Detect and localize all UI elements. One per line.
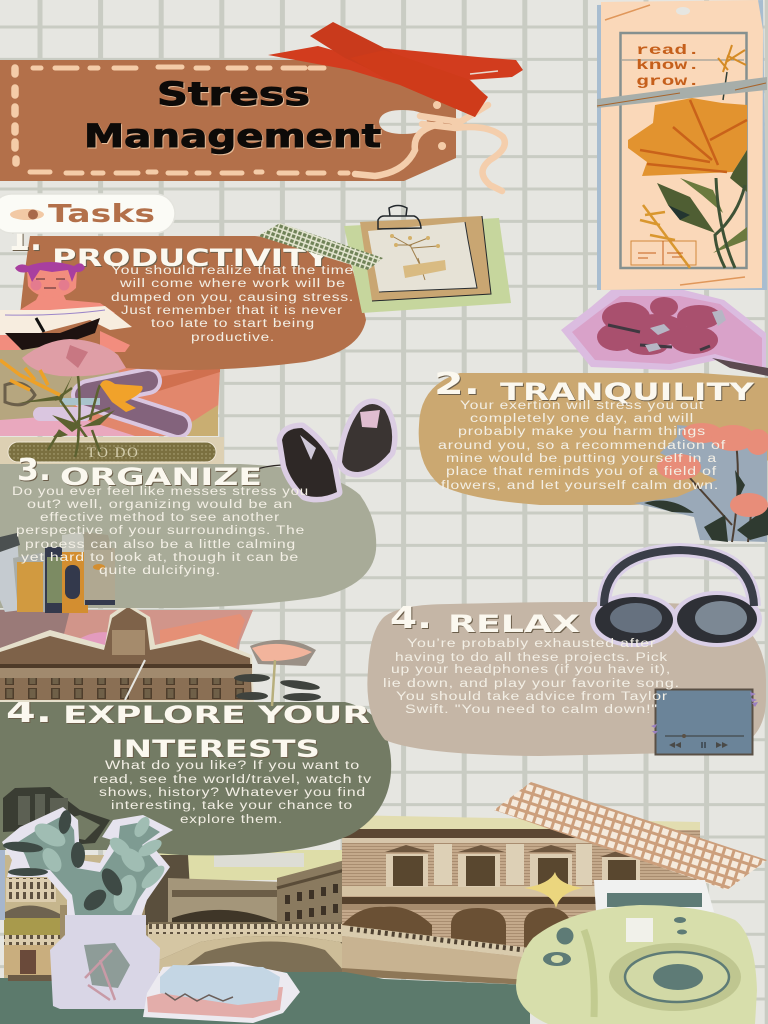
book <box>5 318 100 350</box>
text: relax: You’re probably exhausted after <box>407 638 656 650</box>
heading: explore <box>6 695 370 763</box>
stone bridge <box>148 922 372 975</box>
right palace <box>342 826 700 960</box>
rose blooms <box>657 423 768 517</box>
small gold sprig <box>640 205 690 268</box>
left palace wall <box>4 855 152 978</box>
panel: tranquility <box>419 367 768 542</box>
headband sticker outline <box>604 550 754 606</box>
leaf mass <box>18 815 160 918</box>
text: tranquility: around you, so a recommendation of <box>438 440 726 452</box>
collage: pink building scene <box>0 603 254 702</box>
tagline <box>636 43 700 90</box>
lilac sticker outlines <box>282 428 337 497</box>
headband <box>604 550 754 606</box>
title <box>84 75 381 155</box>
text: relax: You should take advice from Taylor <box>396 691 668 703</box>
text: productivity: will come where work will be <box>119 278 346 290</box>
pressed plant <box>392 236 438 280</box>
lilac outline <box>561 290 766 375</box>
icon: music player <box>651 690 758 754</box>
icon: plant in glass jar <box>2 807 173 1009</box>
heading: productivity <box>8 223 331 272</box>
pink bloom <box>22 339 126 376</box>
orange lily <box>628 98 747 176</box>
pale leaves <box>31 814 168 914</box>
small top sprig <box>718 45 746 72</box>
heading: tranquility: 2. <box>434 367 480 402</box>
text: productivity: too late to start being <box>151 318 315 330</box>
left boot <box>282 428 337 497</box>
face lines <box>36 279 65 288</box>
panel: read know grow bookmark <box>597 0 767 290</box>
icon: peach rose <box>234 640 321 706</box>
text: tranquility: mine would be putting yourself in a <box>446 453 717 465</box>
heading: tranquility: TRANQUILITY <box>500 378 755 406</box>
palace quay <box>342 936 530 985</box>
heading: productivity: PRODUCTIVITY <box>52 244 331 272</box>
heading: organize <box>17 453 262 491</box>
camera body <box>516 905 757 1024</box>
mini label <box>631 241 696 265</box>
mid building <box>277 860 345 932</box>
text: relax <box>383 638 680 716</box>
flower stems over label <box>48 420 100 457</box>
text: productivity: productive. <box>191 332 275 344</box>
text: productivity: Just remember that it is never <box>121 305 343 317</box>
heading: explore: INTERESTS <box>111 735 320 763</box>
camera buttons <box>556 928 574 944</box>
palace arches <box>384 907 572 955</box>
panel: tasks label <box>0 194 175 233</box>
icon: cream string <box>355 105 505 191</box>
text: tranquility: Your exertion will stress you out <box>460 400 704 412</box>
text: tranquility: flowers, and let yourself calm down. <box>441 480 719 492</box>
lens <box>609 943 741 1011</box>
icon: headphones <box>590 550 762 647</box>
strawberries <box>597 297 721 355</box>
text: explore: interesting, take your chance to <box>111 800 353 812</box>
text: organize: perspective of your surroundings. The <box>16 525 305 537</box>
icon: toggle <box>10 209 44 220</box>
panel: title tag <box>0 60 456 181</box>
pale sky gap <box>150 850 345 880</box>
lace <box>250 465 282 472</box>
hands <box>572 296 762 368</box>
text: relax: having to do all these projects. Pick <box>395 652 668 664</box>
panel: to do label <box>0 437 224 465</box>
venice collage photo <box>0 815 700 1024</box>
panel: tasks label: Tasks <box>48 199 155 228</box>
heading: relax: 4. <box>390 601 432 636</box>
text: organize: quite dulcifying. <box>99 565 221 577</box>
heading: explore: 4. <box>6 695 52 730</box>
lily leaves and stem <box>680 178 723 213</box>
binder clip <box>378 206 421 229</box>
text: productivity: You should realize that the time <box>111 265 354 277</box>
stems <box>48 376 110 455</box>
text: explore: explore them. <box>180 814 283 826</box>
panel: relax <box>367 550 766 756</box>
icon: pink roses <box>634 423 768 542</box>
icon: old books sketch <box>3 787 110 845</box>
blue-gray backing <box>634 425 767 542</box>
text: organize: Do you ever feel like messes stress you <box>12 486 309 498</box>
gray tape band <box>597 77 767 108</box>
panel: explore your interests <box>0 695 391 855</box>
icon: clipboard with pressed plant <box>344 206 511 313</box>
panel: to do label: TO DO <box>87 445 139 461</box>
viewfinder <box>626 918 653 942</box>
title: Stress <box>157 75 310 113</box>
strawberry stems <box>608 325 710 350</box>
tagline: know. <box>636 58 700 74</box>
orange oval book <box>62 550 88 613</box>
orange book <box>13 552 46 612</box>
film print <box>594 880 714 912</box>
text: explore: read, see the world/travel, watch tv <box>93 774 372 786</box>
text: relax: lie down, and play your favorite song. <box>383 678 680 690</box>
text: tranquility: probably make you harm things <box>458 426 706 438</box>
text: organize: yet hard to look at, though it can be <box>21 552 299 564</box>
palace balustrade <box>342 925 530 958</box>
yellow sprig <box>0 360 60 395</box>
icon: baby shoes <box>250 404 392 497</box>
right boot <box>342 404 392 472</box>
text: relax: Swift. "You need to calm down!" <box>405 704 658 716</box>
green washi tape <box>258 223 383 270</box>
title: Management <box>84 117 381 155</box>
text: tranquility: place that reminds you of a field of <box>446 466 717 478</box>
text: organize <box>12 486 309 577</box>
palace columns <box>434 844 592 885</box>
frame <box>620 33 746 268</box>
icon: soap on pink dish <box>143 962 300 1023</box>
leaves sticker outline <box>2 807 173 920</box>
shaded tower <box>145 855 192 925</box>
hair <box>15 262 85 282</box>
water <box>0 972 530 1024</box>
collage: pink and orange torn paper <box>0 345 221 436</box>
blouse <box>0 306 132 335</box>
text: productivity: dumped on you, causing stress. <box>111 292 354 304</box>
lilac bone shape <box>40 407 85 421</box>
forearm <box>100 331 130 352</box>
palace cut-out outline <box>0 603 254 702</box>
text: organize: process can also be a little calming <box>25 539 296 551</box>
heading: organize: ORGANIZE <box>60 463 262 491</box>
bridge of sighs <box>168 878 282 925</box>
palace facade <box>0 607 252 700</box>
text: relax: up your headphones (if you have it), <box>391 664 671 676</box>
dark green book <box>45 547 63 613</box>
neck and shoulders <box>15 292 115 313</box>
petal shading <box>640 100 747 172</box>
plaid washi tape <box>494 782 767 890</box>
petals <box>628 98 747 176</box>
heading: tranquility <box>434 367 755 406</box>
icon: hands holding strawberries <box>561 290 768 376</box>
glass jar <box>50 915 160 1009</box>
head <box>27 266 77 297</box>
panel: organize <box>0 404 392 613</box>
heading: organize: 3. <box>17 453 51 488</box>
stems <box>690 435 752 542</box>
heading: explore: EXPLORE YOUR <box>63 701 370 729</box>
icon: instant camera <box>516 880 757 1024</box>
gray book <box>0 535 22 612</box>
dark leaves <box>644 470 768 542</box>
text: explore: What do you like? If you want to <box>105 760 360 772</box>
stitched dashes <box>33 67 324 68</box>
icon: stack of books <box>0 532 115 613</box>
text: organize: effective method to see another <box>40 512 280 524</box>
palace windows <box>386 854 640 887</box>
orange bloom <box>100 380 143 412</box>
heading: productivity: 1. <box>8 223 42 258</box>
icon: pink flower with orange bloom <box>0 339 143 455</box>
tan book <box>84 548 115 605</box>
text: explore: shows, history? Whatever you find <box>99 787 366 799</box>
tagline: read. <box>636 43 700 59</box>
icon: yellow sparkle <box>524 872 583 908</box>
text: tranquility: completely one day, and will <box>470 413 694 425</box>
icon: red ribbon bow <box>268 22 523 117</box>
text: tranquility <box>438 400 726 492</box>
text: productivity <box>111 265 354 344</box>
ear cups <box>595 597 673 643</box>
dark leaves <box>3 809 126 914</box>
heading: relax <box>390 601 581 638</box>
panel: productivity <box>8 223 366 370</box>
icon: person reading <box>0 262 132 352</box>
tagline: grow. <box>636 74 700 90</box>
heading: relax: RELAX <box>448 610 581 638</box>
text: explore <box>93 760 372 826</box>
text: organize: out? well, organizing would be an <box>27 499 293 511</box>
